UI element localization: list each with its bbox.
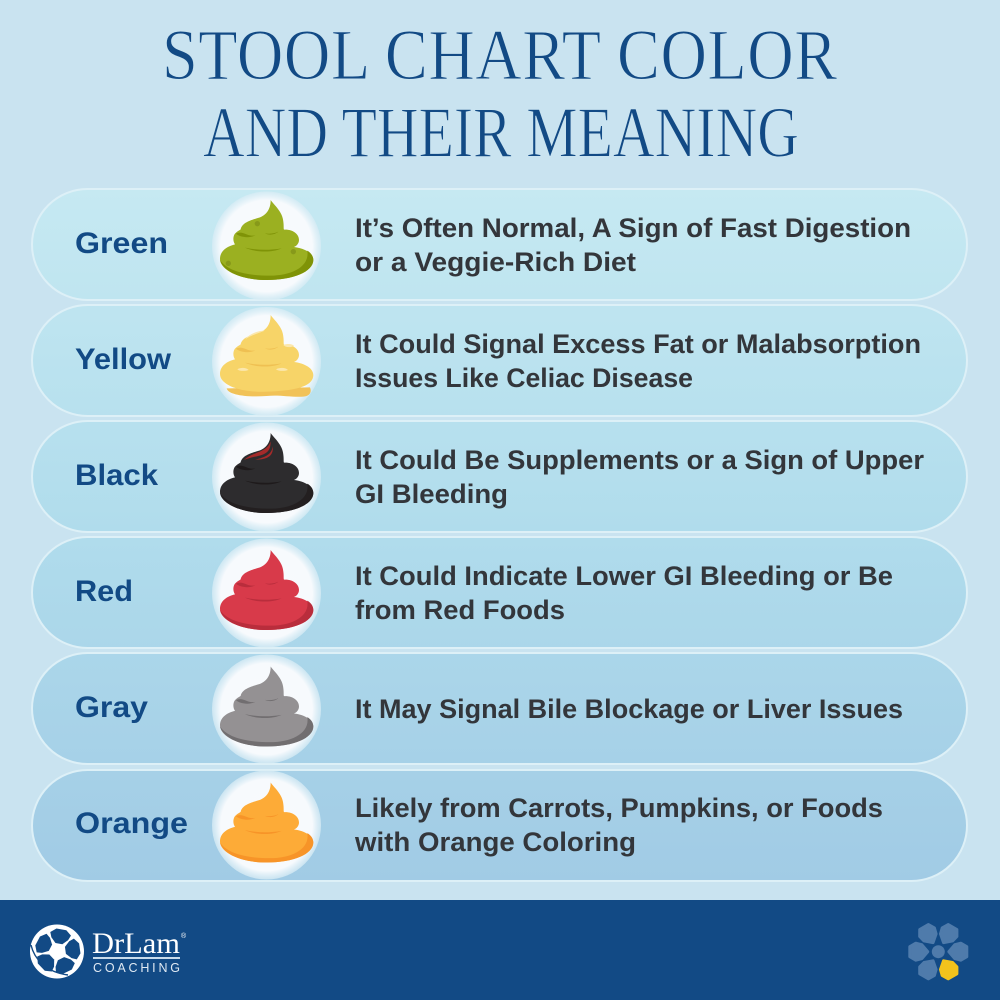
logo: DrLam Coaching (30, 924, 187, 978)
panel: red (32, 537, 967, 648)
panel: green (32, 189, 967, 300)
panel: orange (32, 770, 967, 881)
description: black: GI Bleeding (355, 479, 508, 509)
title (162, 15, 838, 173)
label: gray: Gray (75, 691, 148, 724)
icon: red stool (212, 538, 321, 648)
description: black: It Could Be Supplements or a Sign of Upper (355, 445, 924, 475)
description: yellow (355, 329, 921, 393)
description: green (355, 213, 911, 277)
description: yellow: It Could Signal Excess Fat or Malabsorption (355, 329, 921, 359)
label: black: Black (75, 459, 158, 492)
icon: flower emblem (910, 923, 967, 981)
wordmark: DrLam (92, 927, 180, 960)
footer bar (0, 900, 1000, 1000)
description: black (355, 445, 924, 509)
icon: green stool (212, 192, 321, 300)
description: green: or a Veggie-Rich Diet (355, 247, 636, 277)
panel: yellow (32, 305, 967, 416)
tagline: COACHING (93, 961, 180, 975)
panel: black (32, 421, 967, 532)
label: orange: Orange (75, 807, 188, 840)
icon: gray stool (212, 654, 321, 764)
description: yellow: Issues Like Celiac Disease (355, 363, 693, 393)
icon: logo flower (30, 924, 84, 978)
label: green: Green (75, 227, 168, 260)
description: orange: Likely from Carrots, Pumpkins, or Foods (355, 793, 883, 823)
label: red: Red (75, 575, 133, 608)
icon: black stool (212, 422, 321, 532)
panel: gray (32, 653, 967, 764)
description: red: from Red Foods (355, 595, 565, 625)
description: green: It’s Often Normal, A Sign of Fast Digestion (355, 213, 911, 243)
registered mark: ® (181, 932, 187, 940)
title: AND THEIR MEANING (203, 94, 799, 173)
title: STOOL CHART COLOR (162, 15, 838, 95)
description: red (355, 561, 893, 625)
icon: orange stool (212, 770, 321, 880)
description: gray: It May Signal Bile Blockage or Liver Issues (355, 694, 903, 724)
description: red: It Could Indicate Lower GI Bleeding or Be (355, 561, 893, 591)
description: orange (354, 793, 883, 857)
label: yellow: Yellow (75, 343, 172, 376)
icon: yellow stool (212, 307, 321, 416)
description: orange: with Orange Coloring (354, 827, 636, 857)
